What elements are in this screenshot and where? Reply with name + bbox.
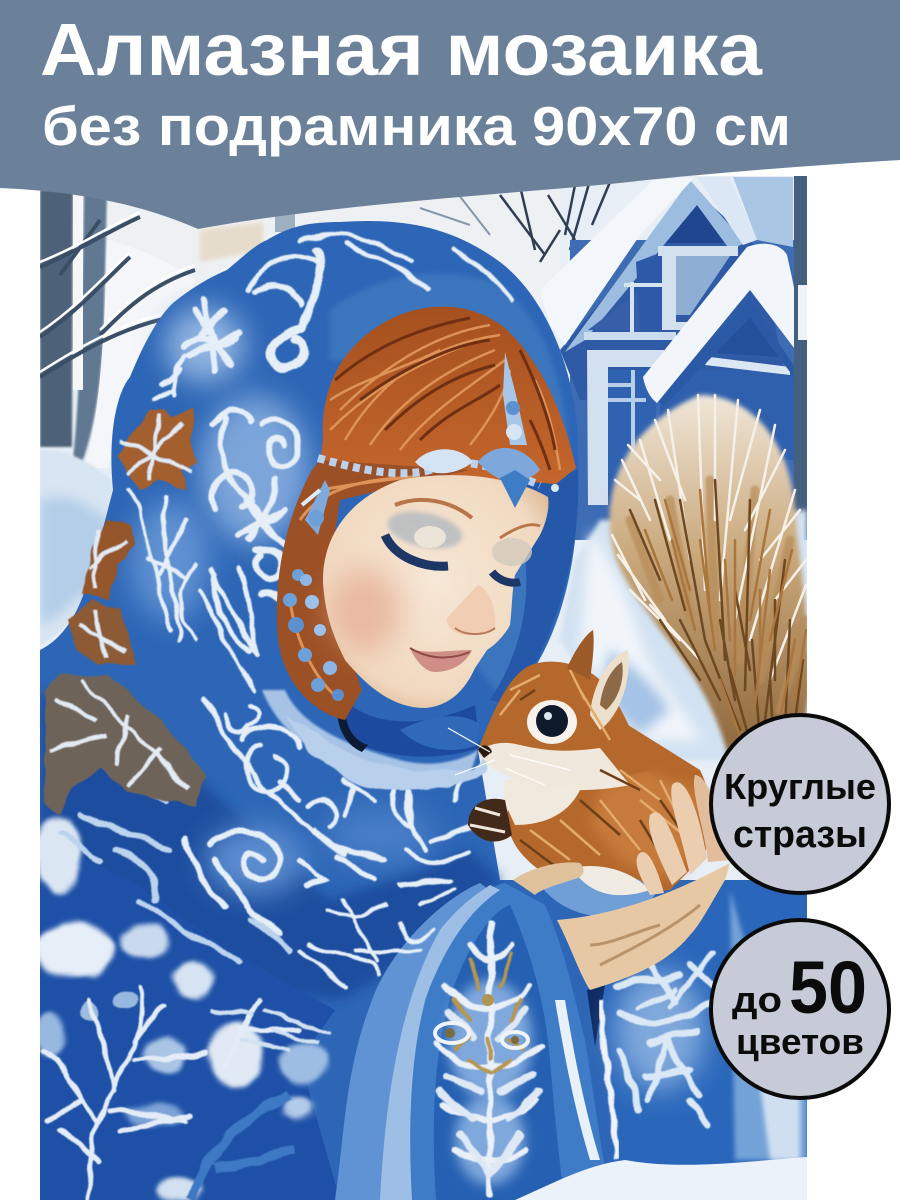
- right robe with floral pattern: [587, 892, 807, 1162]
- badge: up to 50 colours: [711, 920, 889, 1098]
- header banner: [0, 0, 900, 229]
- subtitle: без подрамника 90х70 см: [42, 95, 791, 157]
- badge: up to 50 colours: до: [732, 979, 782, 1020]
- shawl white ornaments: [55, 234, 510, 985]
- badge: up to 50 colours: цветов: [736, 1021, 864, 1062]
- painting: snow maiden with squirrel: [35, 176, 810, 1200]
- squirrel: [448, 630, 711, 916]
- jewelled headband and pendants: [283, 352, 559, 701]
- snow behind squirrel: [560, 510, 807, 760]
- lower left snowy tree panel: [35, 817, 340, 1200]
- sleeve with ornament: [380, 883, 612, 1200]
- badge: up to 50 colours: 50: [789, 946, 867, 1029]
- face: [323, 475, 548, 708]
- snow at bottom right: [515, 1157, 807, 1200]
- long robe column: [335, 883, 486, 1200]
- badge: round rhinestones: Круглые: [724, 766, 876, 807]
- shawl and robe base: [40, 221, 725, 1188]
- hair: [277, 307, 576, 720]
- badge: round rhinestones: [711, 715, 889, 893]
- squirrel tail: [606, 392, 807, 754]
- shawl light drape: [285, 715, 488, 790]
- winter background with trees: [40, 176, 807, 880]
- shawl shading: [40, 274, 578, 1000]
- house: [540, 176, 807, 540]
- badge: round rhinestones: стразы: [733, 814, 867, 856]
- title: Алмазная мозаика: [40, 8, 763, 91]
- brown leaf ornaments: [45, 408, 207, 815]
- hand and fingers: [513, 775, 732, 990]
